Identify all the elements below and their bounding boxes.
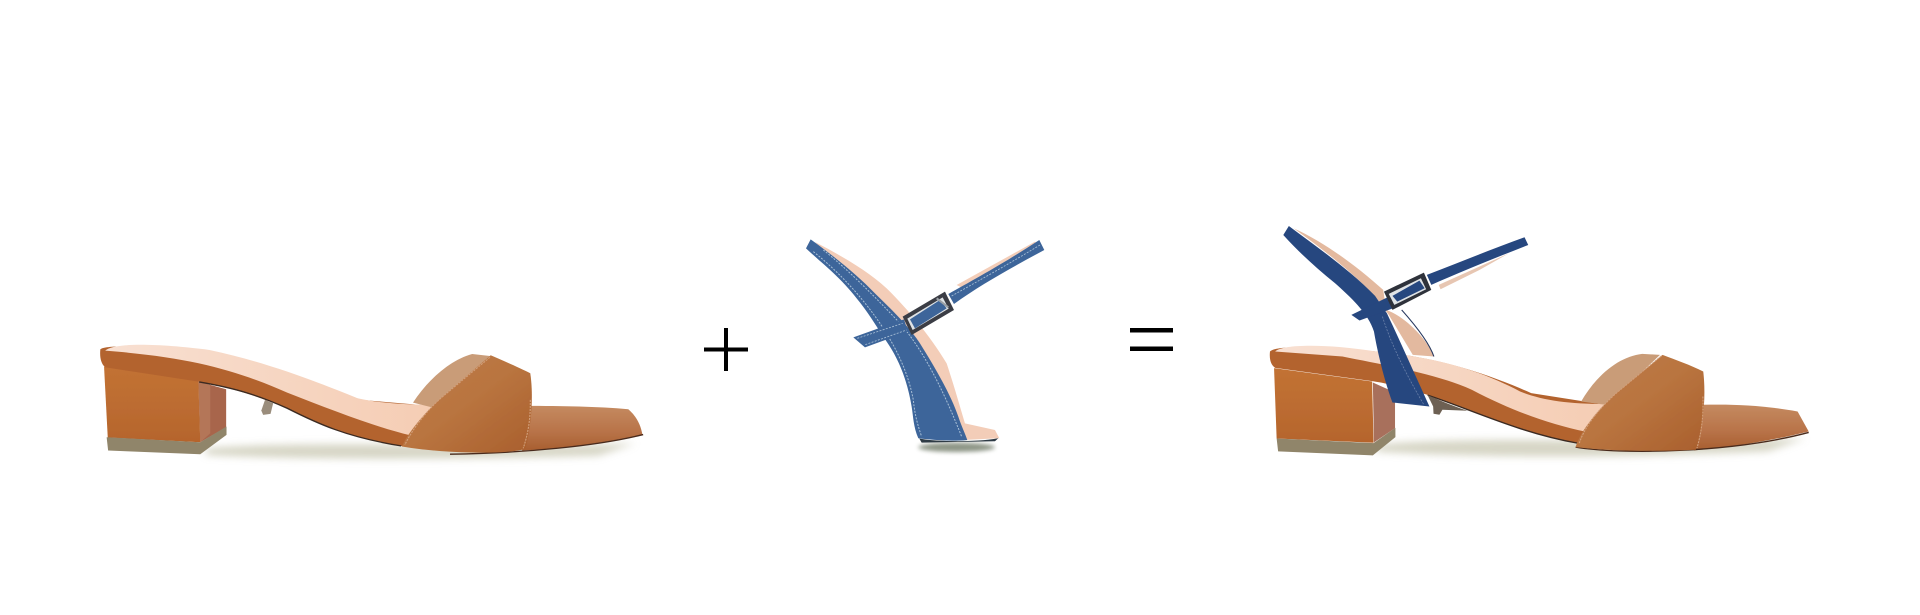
ankle strap tail	[853, 319, 908, 347]
toe bed	[522, 406, 642, 451]
buckle	[1384, 273, 1431, 310]
vamp lining	[1581, 354, 1660, 405]
vamp strap	[1576, 355, 1704, 451]
sole underside line	[1428, 395, 1577, 443]
strap shadow	[918, 443, 995, 452]
insole	[1275, 346, 1605, 431]
ground shadow	[1376, 438, 1805, 456]
block heel	[1274, 368, 1395, 455]
equals sign	[1130, 328, 1173, 351]
upper strap lining	[957, 242, 1038, 288]
slide sandal (tan)	[100, 345, 643, 459]
back panel	[806, 239, 967, 441]
ground shadow	[206, 443, 635, 459]
plus sign	[704, 328, 748, 371]
sole underside line	[199, 382, 401, 446]
metal underside	[1428, 395, 1468, 415]
blue strap lining	[1294, 228, 1434, 357]
ankle strap tail	[1351, 297, 1392, 321]
vamp strap	[402, 355, 532, 453]
sole tip	[919, 438, 998, 443]
block heel	[104, 367, 227, 454]
blue back strap	[1283, 226, 1429, 406]
pink lining	[815, 242, 999, 440]
insole	[105, 345, 433, 435]
toe sole edge	[1576, 432, 1809, 451]
toe bed	[1694, 405, 1809, 450]
upper strap	[1427, 237, 1528, 285]
metal pin	[261, 400, 273, 415]
sole wedge	[1270, 347, 1605, 443]
upper strap	[948, 240, 1044, 304]
finished sandal with blue strap	[1270, 226, 1809, 456]
buckle	[903, 292, 954, 335]
sole wedge	[100, 346, 432, 447]
vamp lining	[413, 354, 490, 407]
toe sole edge	[450, 435, 643, 454]
upper strap lining	[1439, 253, 1509, 289]
detachable blue strap	[806, 239, 1044, 452]
